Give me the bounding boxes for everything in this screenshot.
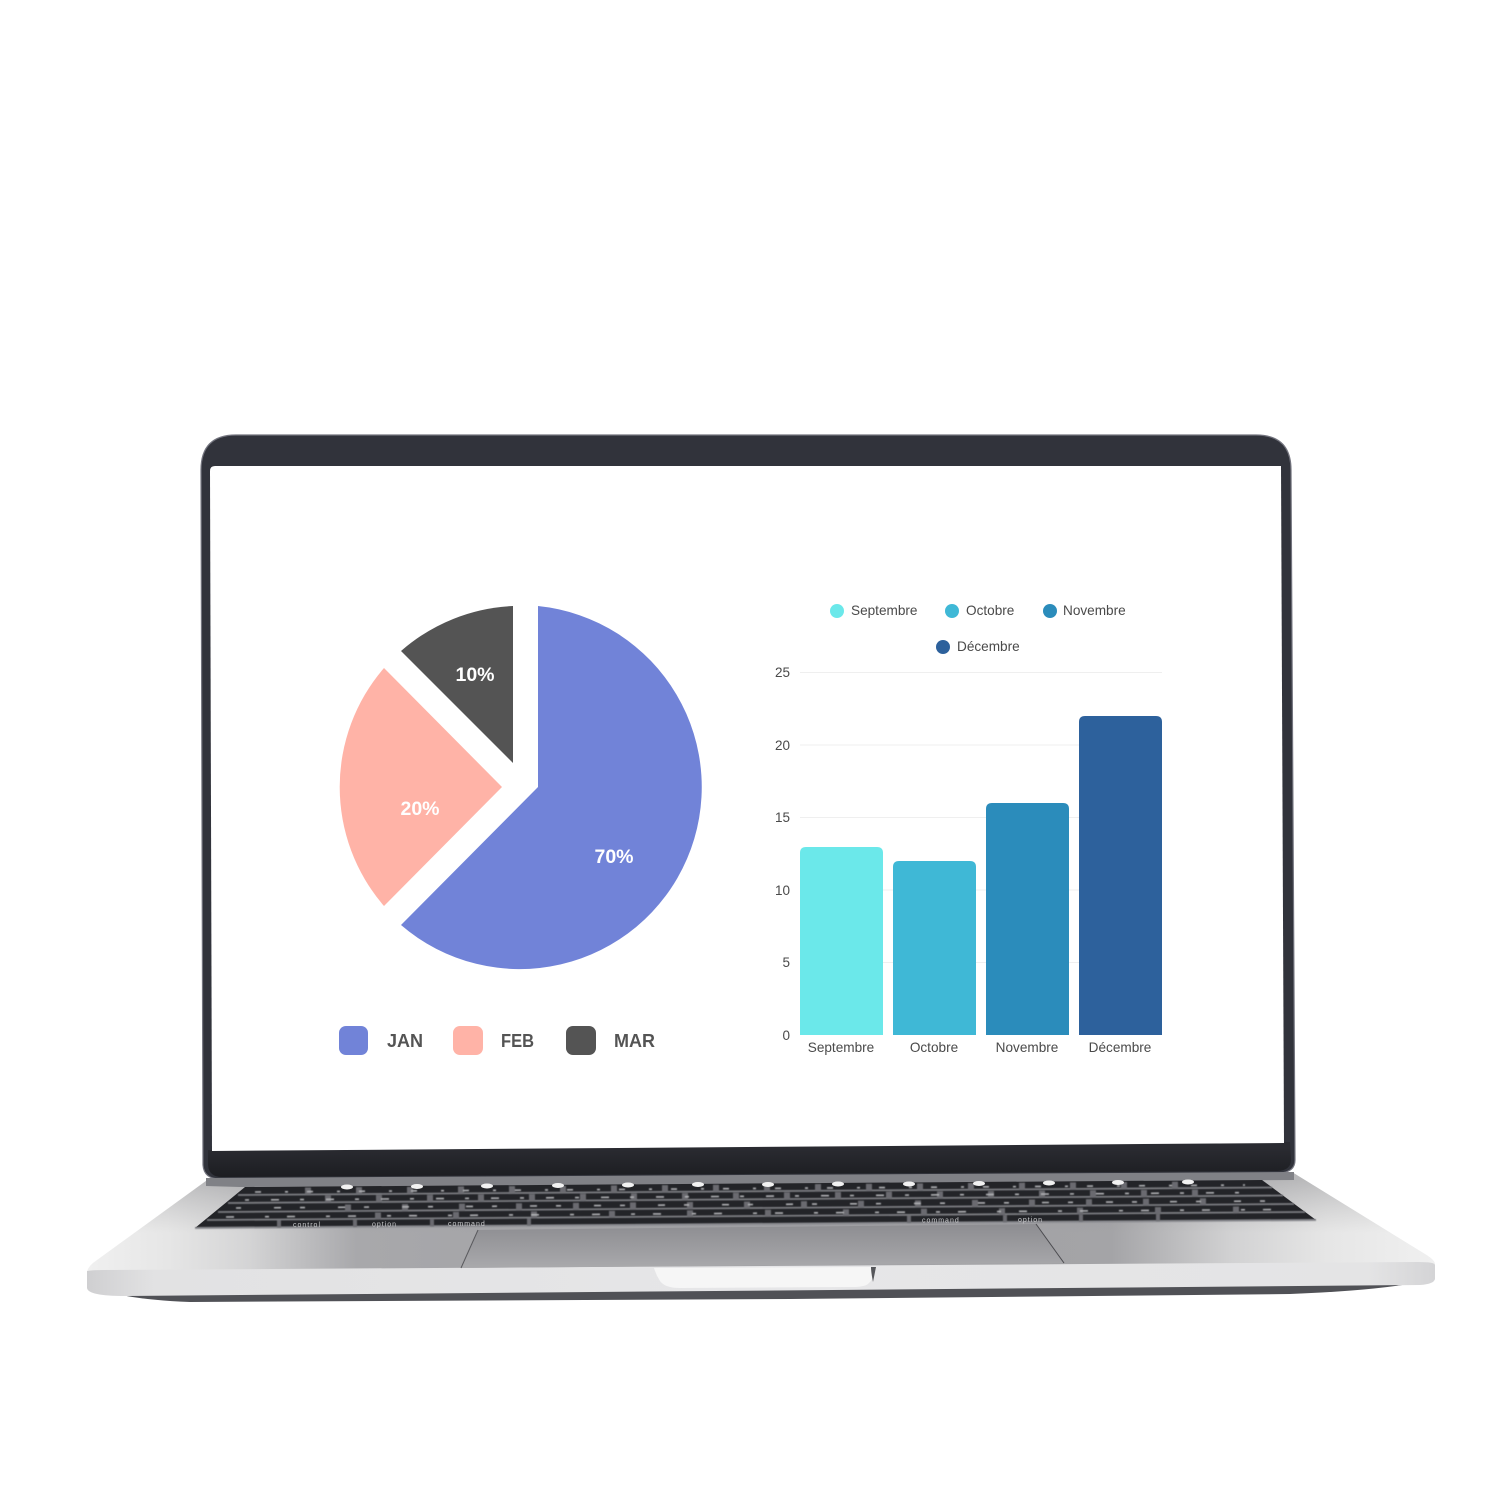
legend item: MAR (566, 1026, 655, 1055)
legend: Octobre: Octobre (966, 603, 1014, 618)
legend: Octobre (945, 603, 1014, 618)
slice: JAN 70% (401, 606, 702, 969)
key details (195, 1185, 1316, 1228)
bar: Décembre (1079, 716, 1162, 1035)
legend: Novembre: Novembre (1063, 603, 1126, 618)
legend item: FEB: FEB (501, 1031, 534, 1051)
legend item: FEB (453, 1026, 534, 1055)
deck top shading (87, 1172, 1435, 1272)
slice: MAR 10%: 10% (455, 664, 495, 686)
modifier key labels: option (1018, 1217, 1043, 1224)
modifier key labels: command (448, 1221, 486, 1228)
x axis labels: Octobre (910, 1040, 958, 1055)
legend item: JAN: JAN (387, 1031, 423, 1051)
modifier key labels (293, 1217, 1043, 1229)
trackpad (461, 1224, 1064, 1268)
modifier key labels: command (922, 1218, 960, 1224)
keyboard (195, 1180, 1316, 1229)
pie chart (340, 606, 702, 969)
modifier key labels: option (372, 1222, 397, 1228)
gridlines (800, 672, 1162, 962)
legend: Décembre: Décembre (957, 639, 1020, 654)
modifier key labels: control (293, 1222, 321, 1229)
y axis labels: 5 (782, 955, 790, 970)
laptop screen (210, 466, 1284, 1151)
slice: FEB 20%: 20% (400, 798, 440, 820)
slice: FEB 20% (340, 668, 502, 906)
bar: Octobre (893, 861, 976, 1035)
slice: MAR 10% (401, 606, 513, 763)
keyboard well (195, 1180, 1316, 1228)
hinge edge (206, 1172, 1294, 1187)
bar: Novembre (986, 803, 1069, 1035)
bar: Septembre (800, 847, 883, 1035)
y axis labels: 20 (775, 738, 790, 753)
laptop front lip (87, 1262, 1435, 1296)
bar chart (775, 603, 1162, 1055)
laptop (87, 435, 1435, 1302)
key legends (226, 1185, 1280, 1217)
lower bezel (208, 1142, 1291, 1177)
y axis labels: 25 (775, 665, 790, 680)
y axis labels (775, 665, 790, 1043)
x axis labels: Novembre (996, 1040, 1058, 1055)
pie legend (339, 1026, 655, 1055)
x axis labels: Septembre (808, 1040, 874, 1055)
legend: Septembre: Septembre (851, 603, 918, 618)
function row lights (341, 1180, 1194, 1190)
laptop lid (201, 435, 1295, 1179)
x axis labels (808, 1040, 1151, 1055)
laptop underside shadow (112, 1283, 1415, 1302)
chart legend (830, 603, 1126, 654)
y axis labels: 0 (782, 1028, 790, 1043)
thumb notch (654, 1267, 876, 1288)
y axis labels: 10 (775, 883, 790, 898)
legend item: JAN (339, 1026, 423, 1055)
key rows (195, 1188, 1316, 1228)
laptop base deck (87, 1172, 1435, 1272)
key gaps (277, 1185, 1245, 1224)
legend item: MAR: MAR (614, 1031, 655, 1051)
x axis labels: Décembre (1089, 1040, 1151, 1055)
slice: JAN 70%: 70% (594, 846, 634, 868)
y axis labels: 15 (775, 810, 790, 825)
